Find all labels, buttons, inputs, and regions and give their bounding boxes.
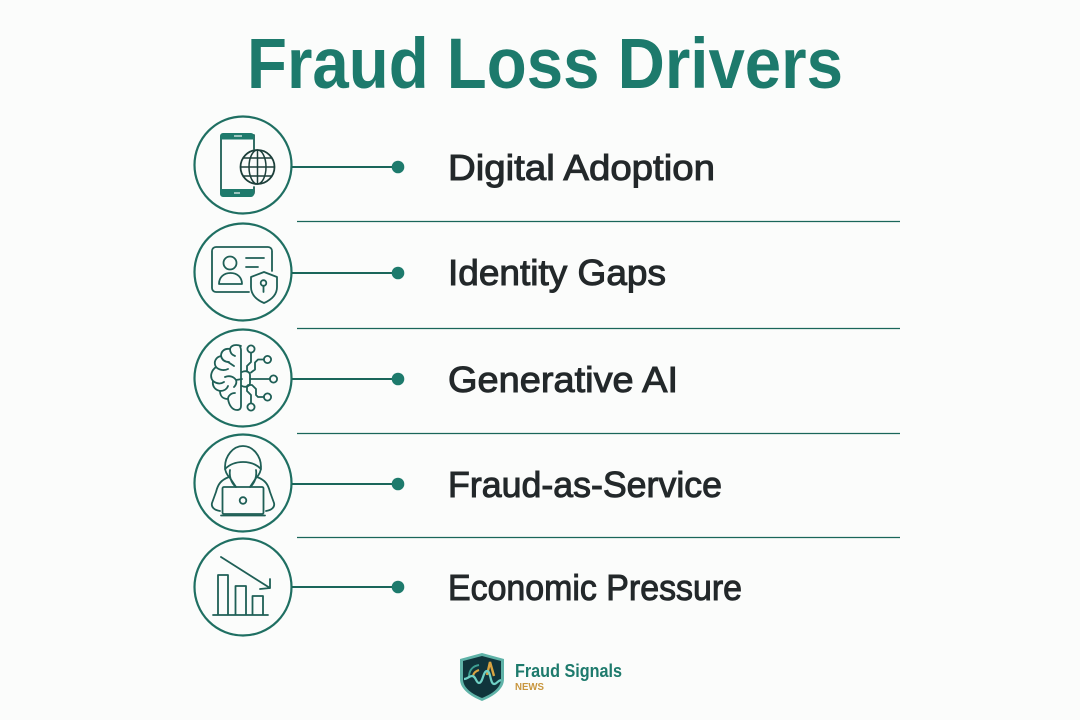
label: Identity Gaps [448, 252, 666, 293]
logo subtitle: NEWS [515, 681, 544, 693]
icon: ID card and shield [194, 224, 292, 320]
connector dot [392, 581, 404, 593]
connector dot [392, 478, 404, 490]
icon: hooded hacker with laptop [194, 434, 292, 532]
label: Fraud-as-Service [448, 464, 722, 505]
connector line [292, 586, 398, 588]
connector line [292, 378, 398, 380]
divider 2 [297, 328, 900, 330]
row: Digital Adoption [194, 116, 715, 214]
connector dot [392, 373, 404, 385]
row: Identity Gaps [194, 224, 666, 320]
connector line [292, 272, 398, 274]
connector dot [392, 161, 404, 173]
divider 1 [297, 220, 900, 222]
logo shield [460, 653, 504, 701]
logo: Fraud Signals News [460, 653, 622, 701]
connector line [292, 166, 398, 168]
title: Fraud Loss Drivers [247, 25, 843, 104]
label: Digital Adoption [448, 147, 715, 188]
row: Generative AI [194, 330, 678, 426]
connector line [292, 483, 398, 485]
row: Economic Pressure [194, 538, 742, 636]
divider 4 [297, 536, 900, 538]
icon: brain circuit [194, 330, 292, 426]
label: Economic Pressure [448, 567, 742, 608]
divider 3 [297, 432, 900, 434]
row: Fraud-as-Service [194, 434, 722, 532]
logo wordmark: Fraud Signals [515, 660, 622, 681]
connector dot [392, 267, 404, 279]
icon: phone and globe [194, 116, 292, 214]
icon: falling bar chart [194, 538, 292, 636]
label: Generative AI [448, 359, 678, 400]
